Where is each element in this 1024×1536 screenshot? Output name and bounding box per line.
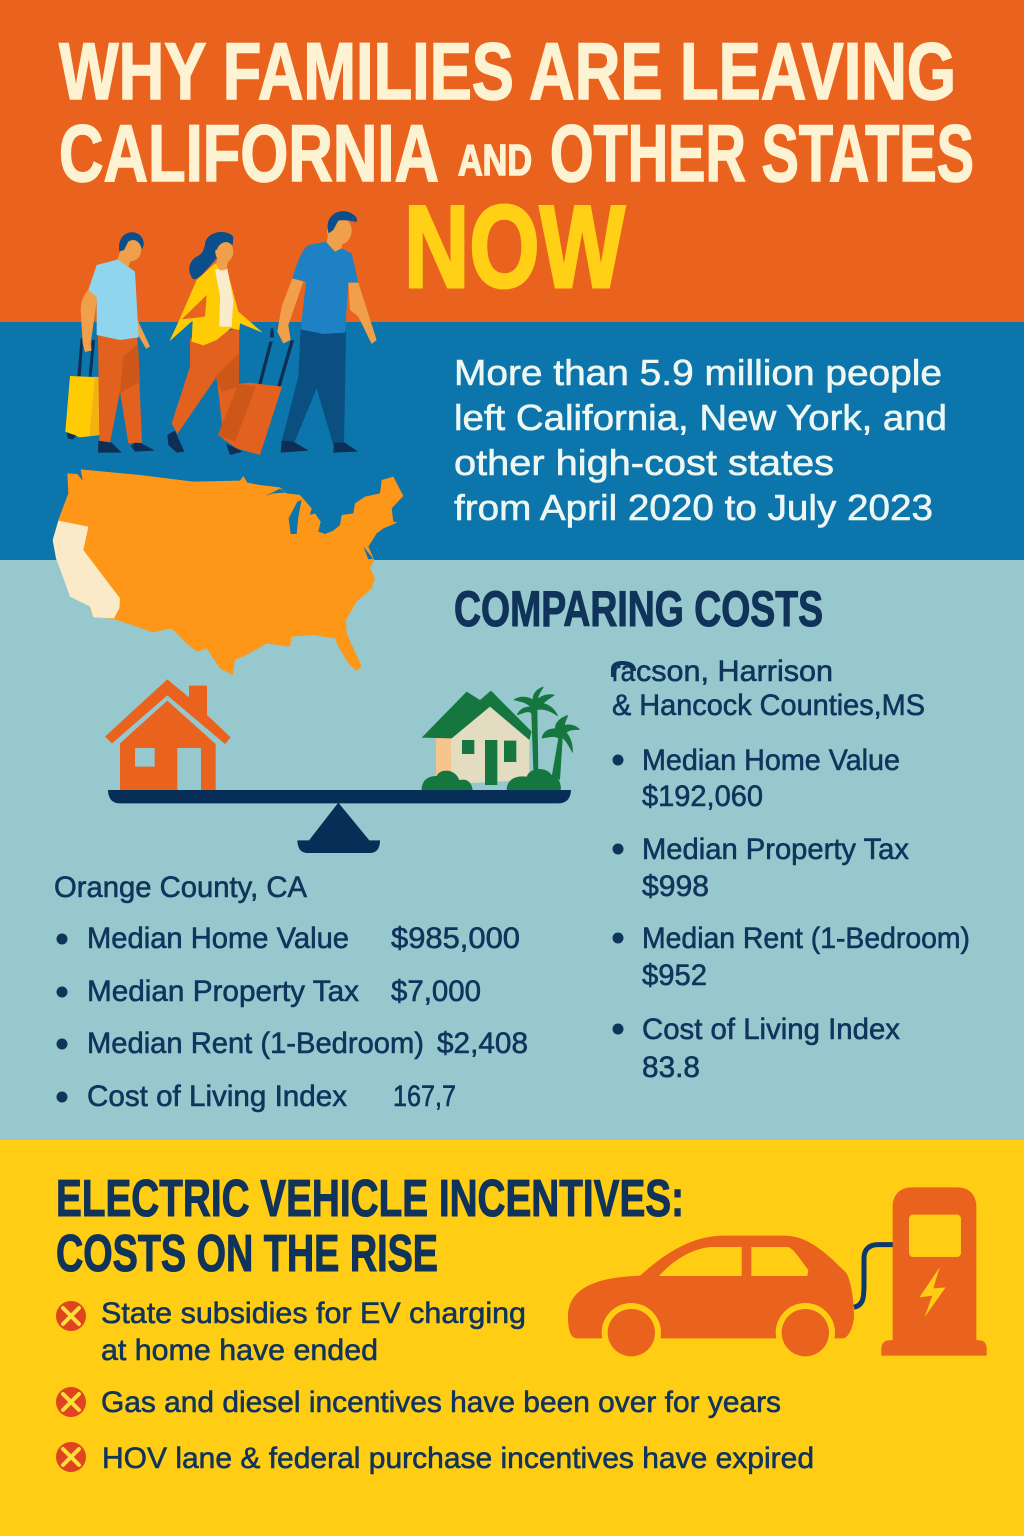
heading: electric vehicle incentives: COSTS ON THE RISE	[56, 1225, 438, 1283]
text block: Mississippi counties costs: ra	[612, 655, 635, 688]
list item: property tax	[612, 833, 909, 903]
icon: car	[568, 1236, 854, 1362]
heading: electric vehicle incentives: ELECTRIC VEHICLE INCENTIVES:	[56, 1170, 684, 1228]
title: CALIFORNIA	[59, 109, 439, 199]
list item: cost of living: Cost of Living Index	[87, 1080, 347, 1113]
icon: red x	[56, 1442, 86, 1472]
statistic text: More than 5.9 million people	[454, 352, 942, 393]
list item: home charging subsidies: at home have ended	[101, 1334, 378, 1367]
icon: charging cable	[854, 1245, 893, 1307]
list item: property tax: $998	[642, 870, 709, 903]
icon: garbled first letters blob	[613, 663, 634, 677]
text block: Mississippi counties costs	[612, 655, 970, 1084]
text block: Mississippi counties costs: cson, Harrison	[636, 655, 833, 688]
list item: rent: $952	[642, 959, 707, 992]
icon: scale beam and fulcrum	[108, 790, 571, 853]
list item: home value	[56, 922, 520, 955]
list item: rent: Median Rent (1-Bedroom)	[642, 922, 970, 955]
heading: electric vehicle incentives	[56, 1170, 684, 1283]
statistic text: left California, New York, and	[454, 397, 947, 438]
list item: cost of living	[56, 1080, 456, 1113]
figure: man with yellow suitcase	[65, 232, 155, 453]
illustration: electric car plugged into charger	[568, 1187, 987, 1362]
list item: home value: Median Home Value	[87, 922, 349, 955]
panel: comparing costs	[0, 560, 1024, 1140]
list item: HOV lane and federal incentives: HOV lane & federal purchase incentives have expired	[102, 1442, 814, 1475]
list item: rent	[612, 922, 970, 992]
text block: Mississippi counties costs: & Hancock Counties,MS	[612, 689, 925, 722]
title: NOW	[404, 181, 625, 312]
list item: cost of living	[612, 1013, 900, 1084]
title: AND	[458, 136, 532, 185]
list item: home value	[612, 744, 900, 813]
list item: home charging subsidies	[101, 1297, 526, 1367]
title	[59, 27, 974, 312]
list item: home value: $985,000	[391, 922, 520, 955]
list item: rent: Median Rent (1-Bedroom)	[87, 1027, 424, 1060]
text block: Orange County costs	[54, 871, 528, 1113]
figure: woman in yellow jacket	[167, 232, 263, 455]
illustration: balance scale with two houses	[105, 679, 580, 853]
icon: charging station	[881, 1187, 987, 1356]
list item: home value: Median Home Value	[642, 744, 900, 777]
panel: electric vehicle incentives	[0, 1140, 1024, 1536]
list item: cost of living: Cost of Living Index	[642, 1013, 900, 1046]
list item: home value: $192,060	[642, 780, 763, 813]
list item: rent: $2,408	[437, 1027, 528, 1060]
icon: red x	[56, 1301, 86, 1331]
figure: man in blue shirt with orange suitcase	[218, 211, 377, 455]
panel: blue statistic band	[0, 322, 1024, 560]
list item: property tax	[56, 975, 481, 1008]
illustration: family walking with suitcases	[65, 211, 377, 455]
statistic text: other high-cost states	[454, 442, 834, 483]
list item: property tax: Median Property Tax	[87, 975, 359, 1008]
icon: orange house	[105, 679, 231, 790]
list item: home charging subsidies: State subsidies for EV charging	[101, 1297, 526, 1330]
text block: Orange County costs: Orange County, CA	[54, 871, 307, 904]
list item: property tax: Median Property Tax	[642, 833, 909, 866]
list item: gas and diesel: Gas and diesel incentives have been over for years	[101, 1386, 781, 1419]
icon: red x	[56, 1387, 86, 1417]
icon: house with palm trees	[422, 687, 580, 790]
list item: property tax: $7,000	[391, 975, 481, 1008]
statistic text: from April 2020 to July 2023	[454, 487, 933, 528]
heading: comparing costs: COMPARING COSTS	[454, 581, 823, 637]
list item: cost of living: 167,7	[393, 1080, 456, 1113]
statistic text	[454, 352, 947, 528]
list item: cost of living: 83.8	[642, 1051, 700, 1084]
list: EV incentive items	[56, 1297, 814, 1475]
panel: orange header	[0, 0, 1024, 322]
illustration: US map with California highlighted	[53, 469, 403, 675]
